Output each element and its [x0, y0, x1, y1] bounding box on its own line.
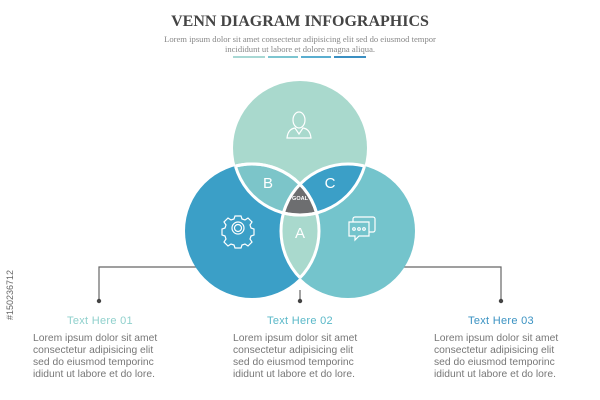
column 3: Lorem ipsum dolor sit amet	[434, 333, 558, 344]
column 3: consectetur adipisicing elit	[434, 345, 554, 356]
labels: A	[295, 225, 305, 242]
venn diagram	[185, 81, 415, 298]
column 3: ididunt ut labore et do lore.	[434, 369, 556, 380]
labels: GOAL	[292, 196, 309, 202]
labels: C	[325, 175, 336, 192]
labels: B	[263, 175, 273, 192]
circle: left	[185, 164, 319, 298]
circle: top	[233, 81, 367, 215]
overlap B	[235, 162, 300, 211]
subtitle: incididunt ut labore et dolore magna aliqua.	[225, 44, 375, 54]
icon: gear	[222, 216, 254, 248]
overlap C	[282, 162, 365, 211]
title underline bars	[233, 56, 366, 58]
column 2: sed do eiusmod temporinc	[233, 357, 354, 368]
column 3	[434, 315, 558, 380]
goal center	[282, 184, 314, 214]
column 1: sed do eiusmod temporinc	[33, 357, 154, 368]
column 1: Text Here 01	[67, 315, 133, 327]
column 2: Text Here 02	[267, 315, 333, 327]
column 2: Lorem ipsum dolor sit amet	[233, 333, 357, 344]
column 1: consectetur adipisicing elit	[33, 345, 153, 356]
column 2: ididunt ut labore et do lore.	[233, 369, 355, 380]
column 2: consectetur adipisicing elit	[233, 345, 353, 356]
column 1	[33, 315, 158, 380]
column 3: sed do eiusmod temporinc	[434, 357, 555, 368]
side id text: #150236712	[5, 270, 15, 320]
subtitle	[164, 34, 436, 54]
icon: chat	[349, 217, 375, 240]
column 2	[233, 315, 358, 380]
subtitle: Lorem ipsum dolor sit amet consectetur adipisicing elit sed do eiusmod tempor	[164, 34, 436, 44]
column 1: Lorem ipsum dolor sit amet	[33, 333, 157, 344]
title: VENN DIAGRAM INFOGRAPHICS	[171, 13, 429, 30]
overlap A	[280, 214, 318, 279]
column 1: ididunt ut labore et do lore.	[33, 369, 155, 380]
column 3: Text Here 03	[468, 315, 534, 327]
icon: person	[287, 112, 311, 138]
circle: right	[281, 164, 415, 298]
labels	[263, 175, 336, 242]
